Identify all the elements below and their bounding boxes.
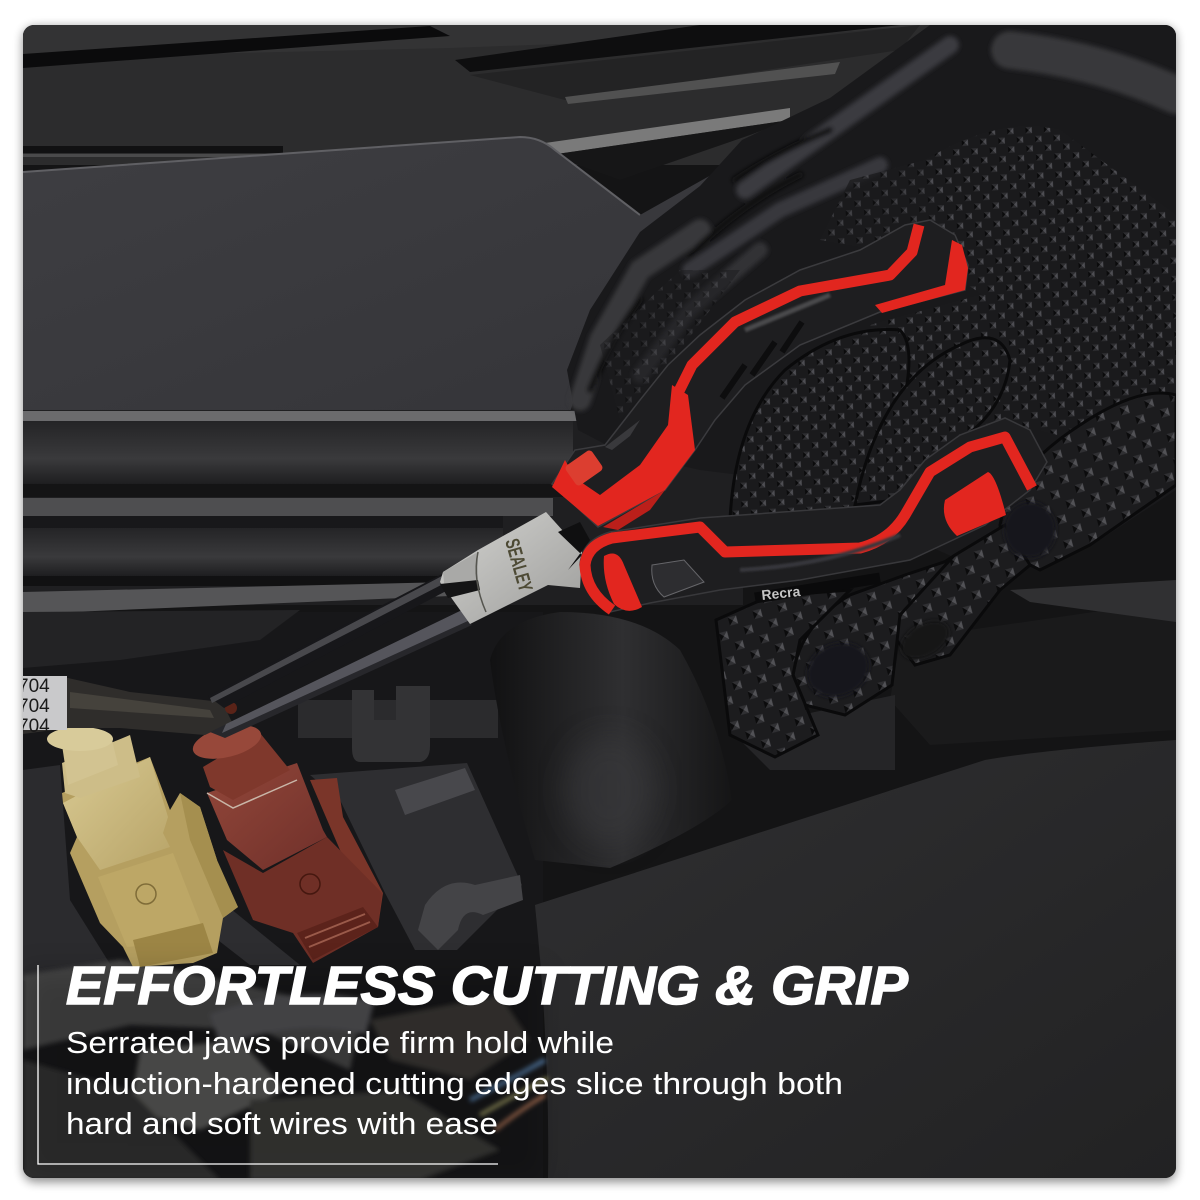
text legibility gradient (23, 970, 543, 1180)
glove: fingertip shadows (798, 502, 1056, 707)
body text: hard and soft wires with ease (66, 1106, 498, 1141)
hose elbow (496, 612, 703, 868)
wire with label: 704 (18, 716, 50, 737)
blurred wiring at bottom left (23, 960, 548, 1180)
felt insulation cover (535, 740, 1176, 1180)
frame: corner rule (38, 965, 498, 1164)
glove: fingers (716, 330, 1176, 757)
glove: back of hand (567, 25, 1176, 421)
pliers: lower handle: Recra (761, 583, 801, 603)
right side dark trim behind glove (890, 600, 1176, 745)
beige connector (47, 727, 238, 967)
wire with label (18, 676, 237, 737)
pliers: steel pivot with logo: SEALEY (500, 536, 536, 595)
pliers: lower handle (580, 418, 1047, 612)
pliers: long-nose jaws (208, 574, 472, 738)
wire with label: 704 (18, 676, 50, 697)
pliers: upper handle (552, 220, 968, 530)
pliers: steel pivot with logo (440, 512, 590, 624)
body text: induction-hardened cutting edges slice through both (66, 1066, 843, 1101)
title: EFFORTLESS CUTTING & GRIP (66, 956, 909, 1016)
wire with label: 704 (18, 696, 50, 717)
body text (66, 1025, 843, 1141)
engine bay: plastic cover panel (23, 137, 720, 424)
engine bay: rubber ribbed seal (23, 410, 743, 614)
engine bay: upper strip (23, 25, 1176, 180)
body text: Serrated jaws provide firm hold while (66, 1025, 614, 1060)
red-brown connector (189, 719, 383, 963)
glove: textured palm grip (925, 126, 1176, 375)
engine bay: lower dark components (23, 610, 543, 1182)
